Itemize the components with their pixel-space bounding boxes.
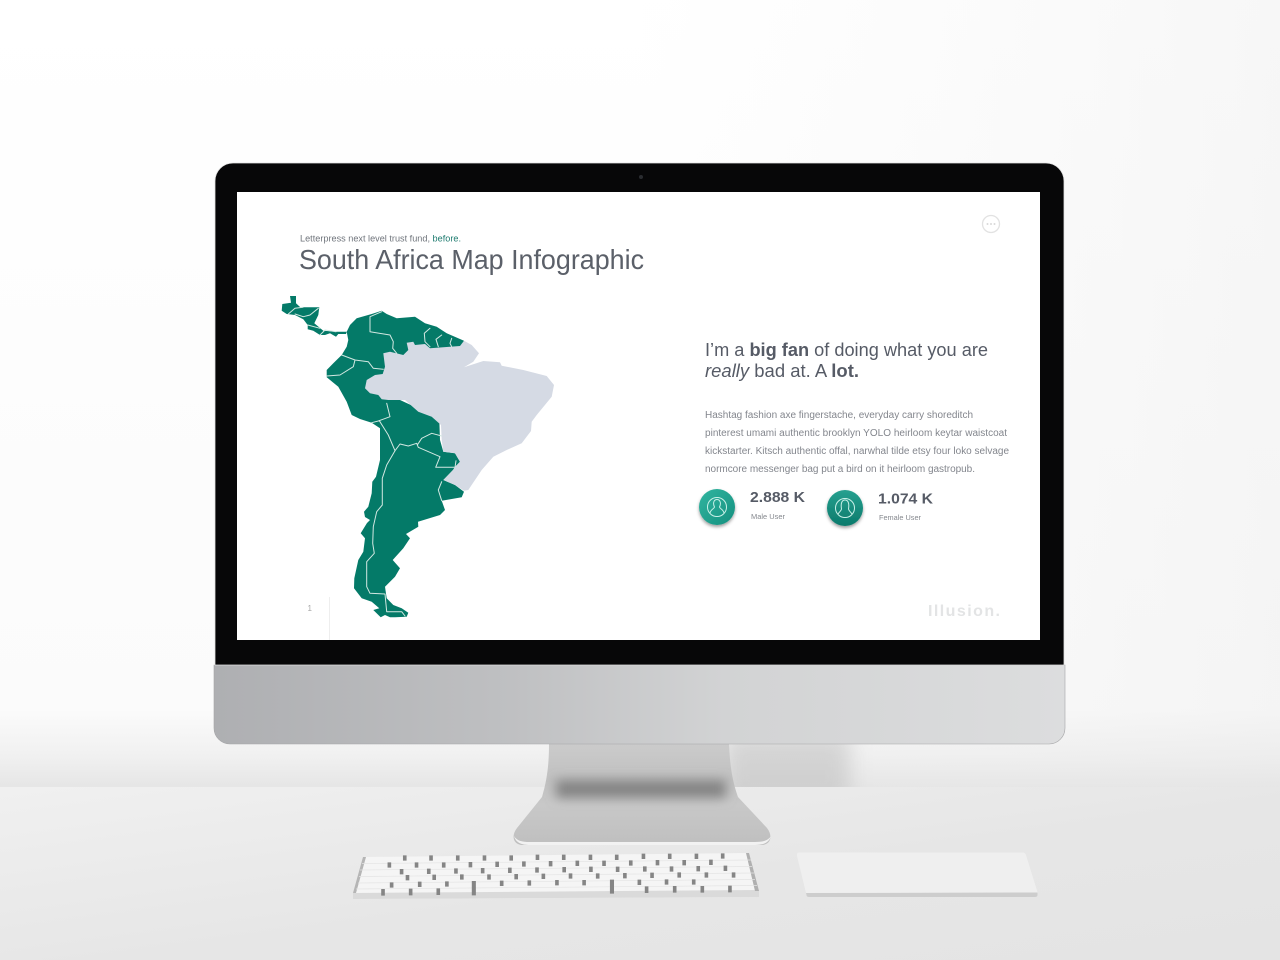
region: Brazil (365, 341, 554, 491)
icon: male user (699, 489, 735, 525)
subtitle: Letterpress next level trust fund, before. (300, 234, 461, 244)
map: South America (282, 296, 554, 617)
keyboard (353, 853, 759, 899)
icon: menu dots (982, 216, 1000, 232)
country borders (288, 307, 456, 616)
stat: female user (827, 490, 933, 526)
brand wordmark: Illusion. (928, 603, 1000, 620)
statement heading (705, 339, 988, 381)
body paragraph: kickstarter. Kitsch authentic offal, narwhal tilde etsy four loko selvage (705, 446, 1009, 457)
webcam (639, 175, 643, 179)
monitor stand (514, 744, 771, 845)
label: Male User (751, 512, 785, 521)
stat: male user (699, 489, 805, 525)
body paragraph (705, 410, 1009, 475)
statement heading: really bad at. A lot. (705, 360, 859, 381)
value: 2.888 K (750, 489, 805, 506)
title: South Africa Map Infographic (299, 244, 644, 275)
slide screen (237, 192, 1040, 640)
region: green countries (327, 311, 464, 617)
slide heading (299, 234, 644, 275)
keyboard key gaps (381, 853, 735, 896)
body paragraph: normcore messenger bag put a bird on it heirloom gastropub. (705, 464, 975, 475)
body paragraph: Hashtag fashion axe fingerstache, everyday carry shoreditch (705, 410, 973, 421)
icon: female user (827, 490, 863, 526)
statement heading: I’m a big fan of doing what you are (705, 339, 988, 360)
monitor (214, 163, 1065, 744)
page number: 1 (308, 604, 312, 613)
body paragraph: pinterest umami authentic brooklyn YOLO heirloom keytar waistcoat (705, 428, 1007, 439)
page number (308, 597, 330, 640)
value: 1.074 K (878, 490, 933, 508)
trackpad (797, 852, 1038, 897)
label: Female User (879, 513, 921, 522)
region: Central America (282, 296, 347, 337)
monitor bezel (215, 163, 1064, 665)
monitor chin (214, 665, 1065, 744)
